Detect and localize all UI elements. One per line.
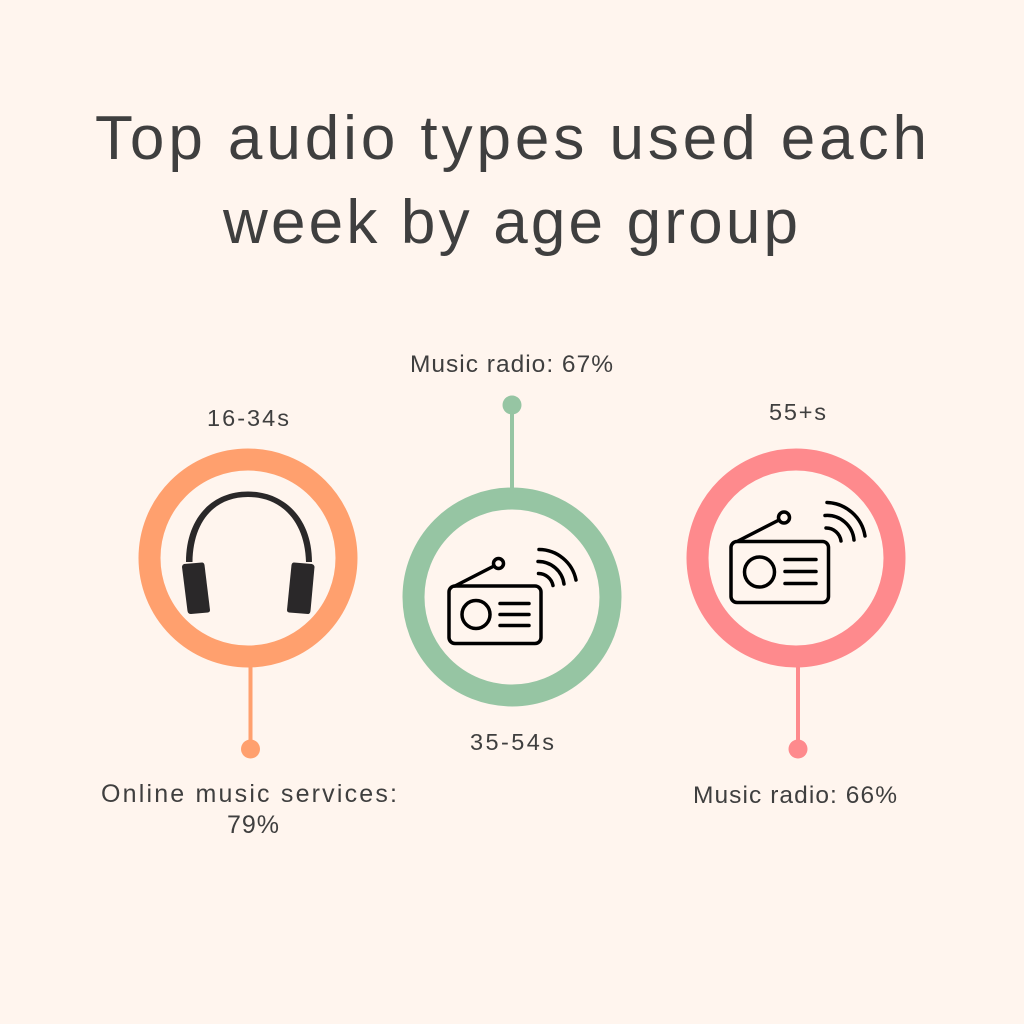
panel: 16-34s xyxy=(101,405,397,839)
panel: 55+s xyxy=(693,399,897,809)
age label: 35-54s: 35-54s xyxy=(470,729,554,755)
stat label: online music services: Online music services: xyxy=(101,780,397,808)
connector line and dot xyxy=(241,666,260,758)
stat label: music radio 66%: Music radio: 66% xyxy=(693,782,897,809)
connector line and dot xyxy=(502,396,522,489)
stat label: online music services: 79% xyxy=(227,811,279,839)
age label: 55+s: 55+s xyxy=(769,399,826,425)
age label: 16-34s: 16-34s xyxy=(207,405,289,431)
icon: radio xyxy=(449,550,576,644)
stat label: music radio 67%: Music radio: 67% xyxy=(410,351,613,378)
title: Top audio types used each xyxy=(95,104,927,173)
green ring xyxy=(414,498,610,696)
panel: 35-54s xyxy=(410,351,613,755)
title: week by age group xyxy=(222,188,798,257)
connector line and dot xyxy=(788,666,808,758)
orange ring xyxy=(150,460,346,656)
title xyxy=(95,104,927,257)
pink ring xyxy=(698,460,894,656)
icon: radio xyxy=(731,502,865,602)
icon: headphones xyxy=(182,492,314,614)
stat label: online music services xyxy=(101,780,397,839)
